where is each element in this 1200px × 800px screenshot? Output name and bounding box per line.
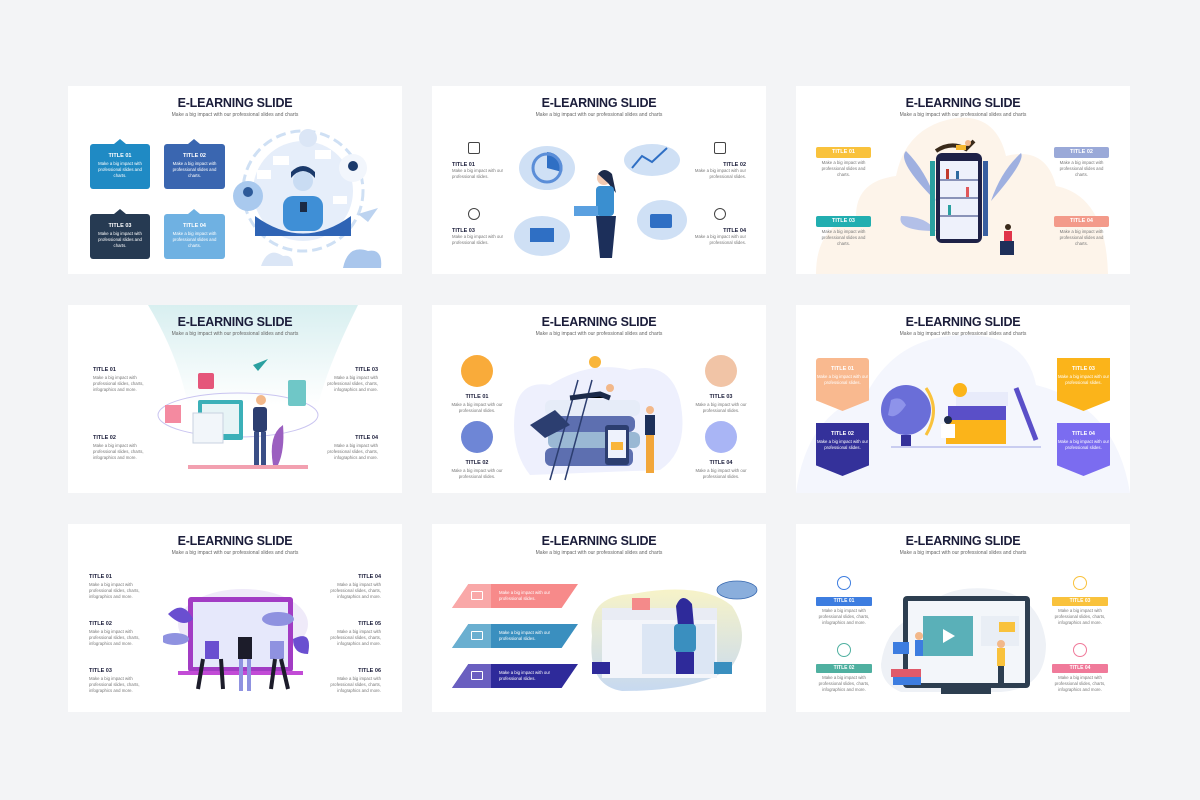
illustration: monitor with video (881, 588, 1046, 694)
item: title 01: TITLE 01 (93, 367, 116, 373)
illustration: books, ladder, students (514, 356, 682, 480)
background cloud (816, 118, 1108, 274)
item: title 02: Make a big impact with professional slides and charts. (1060, 160, 1103, 177)
subtitle: Make a big impact with our professional slides and charts (172, 112, 298, 118)
banner: title 03: Make a big impact with our professional slides. (1058, 374, 1109, 385)
item: title 01 (452, 142, 503, 179)
item: title 03 (89, 668, 140, 693)
item: title 02: TITLE 02 (93, 435, 116, 441)
banner 3: Make a big impact with our professional slides. (499, 670, 550, 681)
item: title 01: Make a big impact with our professional slides. (452, 168, 503, 179)
banner 3 (452, 664, 578, 688)
background shape (148, 305, 358, 384)
item: title 03: TITLE 03 (452, 228, 475, 234)
item: title 03 (1052, 576, 1108, 625)
banner 2 (452, 624, 578, 648)
item: title 02: TITLE 02 (1070, 149, 1093, 155)
item: title 04: Make a big impact with our professional slides. (695, 234, 746, 245)
banner: title 01: TITLE 01 (831, 366, 854, 372)
box: title 02: TITLE 02 (183, 153, 206, 159)
subtitle: Make a big impact with our professional slides and charts (536, 550, 662, 556)
banner: title 04: TITLE 04 (1072, 431, 1095, 437)
illustration: person in circle (233, 129, 382, 268)
banner 1 (452, 584, 578, 608)
heading: E-LEARNING SLIDE (542, 96, 656, 110)
item: title 03: TITLE 03 (832, 218, 855, 224)
subtitle: Make a big impact with our professional slides and charts (900, 550, 1026, 556)
item: title 03: Make a big impact with our professional slides. (695, 402, 747, 413)
item: title 03: Make a big impact with professional slides and charts. (822, 229, 865, 246)
item: title 06: Make a big impact with professional slides, charts, infographics and more. (330, 676, 381, 693)
illustration: phone bookshelf (900, 140, 1022, 255)
item: title 01 (816, 147, 871, 177)
slide 9: pills with monitor (796, 524, 1130, 712)
item: title 02 (89, 621, 140, 646)
heading: E-LEARNING SLIDE (906, 315, 1020, 329)
item: title 01: Make a big impact with our professional slides. (451, 402, 503, 413)
banner 2: Make a big impact with our professional slides. (499, 630, 550, 641)
slide 8: parallelogram banners with teacher (432, 524, 766, 712)
item: title 04: Make a big impact with our professional slides. (695, 468, 747, 479)
heading: E-LEARNING SLIDE (178, 315, 292, 329)
item: title 04: TITLE 04 (723, 228, 746, 234)
banner: title 02 (816, 423, 869, 476)
item: title 04: Make a big impact with professional slides, charts, infographics and more. (330, 582, 381, 599)
item: title 01: TITLE 01 (832, 149, 855, 155)
item: title 05 (330, 621, 381, 646)
item: title 01: TITLE 01 (466, 394, 488, 400)
box: title 04: Make a big impact with professional slides and charts. (173, 231, 216, 248)
item: title 03 (816, 216, 871, 246)
box: title 02: Make a big impact with professional slides and charts. (173, 161, 216, 178)
item: title 03: Make a big impact with professional slides, charts, infographics and more. (1055, 608, 1105, 625)
item: title 06: TITLE 06 (358, 668, 381, 674)
item: title 01 (93, 367, 144, 392)
banner: title 01 (816, 358, 869, 411)
background cloud (796, 335, 1130, 493)
heading: E-LEARNING SLIDE (542, 534, 656, 548)
item: title 03: Make a big impact with our professional slides. (452, 234, 503, 245)
item: title 02: Make a big impact with professional slides, charts, infographics and more. (819, 675, 869, 692)
subtitle: Make a big impact with our professional slides and charts (172, 550, 298, 556)
subtitle: Make a big impact with our professional slides and charts (536, 112, 662, 118)
slide 7: six titles with laptop and graduates (68, 524, 402, 712)
item: title 01: TITLE 01 (452, 162, 475, 168)
item: title 03: Make a big impact with professional slides, charts, infographics and more. (89, 676, 140, 693)
illustration: woman with laptop and blobs (514, 144, 687, 258)
heading: E-LEARNING SLIDE (178, 96, 292, 110)
illustration: globe, books, pencil (881, 383, 1041, 448)
item: title 03: TITLE 03 (1070, 598, 1090, 604)
item: title 01: Make a big impact with professional slides and charts. (822, 160, 865, 177)
banner: title 03 (1057, 358, 1110, 411)
item: title 02: TITLE 02 (834, 665, 854, 671)
item: title 02 (1054, 147, 1109, 177)
item: title 04 (330, 574, 382, 599)
box: title 03: TITLE 03 (109, 223, 131, 229)
item: title 02 (451, 421, 503, 479)
item: title 01 (816, 576, 872, 625)
box: title 01: TITLE 01 (109, 153, 131, 159)
heading: E-LEARNING SLIDE (178, 534, 292, 548)
item: title 01 (89, 574, 140, 599)
item: title 04: TITLE 04 (355, 435, 378, 441)
box: title 02 (164, 144, 225, 189)
item: title 02: Make a big impact with our professional slides. (695, 168, 746, 179)
illustration: screens and man (158, 359, 318, 469)
heading: E-LEARNING SLIDE (906, 534, 1020, 548)
item: title 01: TITLE 01 (834, 598, 854, 604)
item: title 04 (695, 208, 746, 245)
subtitle: Make a big impact with our professional slides and charts (900, 112, 1026, 118)
item: title 02: TITLE 02 (89, 621, 112, 627)
slide 3: phone bookshelf with pills (796, 86, 1130, 274)
item: title 04: Make a big impact with professional slides, charts, infographics and more. (1055, 675, 1105, 692)
item: title 03: TITLE 03 (355, 367, 378, 373)
item: title 04 (327, 435, 378, 460)
subtitle: Make a big impact with our professional slides and charts (900, 331, 1026, 337)
item: title 01: TITLE 01 (89, 574, 112, 580)
item: title 03: TITLE 03 (89, 668, 112, 674)
item: title 03: TITLE 03 (710, 394, 732, 400)
box: title 03 (90, 214, 150, 259)
banner: title 02: Make a big impact with our professional slides. (817, 439, 868, 450)
subtitle: Make a big impact with our professional slides and charts (536, 331, 662, 337)
heading: E-LEARNING SLIDE (542, 315, 656, 329)
item: title 02: Make a big impact with professional slides, charts, infographics and more. (89, 629, 140, 646)
box: title 01: Make a big impact with professional slides and charts. (98, 161, 142, 178)
item: title 04 (1052, 643, 1108, 692)
banner 1: Make a big impact with our professional slides. (499, 590, 550, 601)
illustration: video lesson teacher (591, 580, 758, 691)
heading: E-LEARNING SLIDE (906, 96, 1020, 110)
item: title 03 (695, 355, 747, 413)
item: title 04: TITLE 04 (710, 460, 732, 466)
item: title 02: Make a big impact with professional slides, charts, infographics and more. (93, 443, 144, 460)
item: title 04 (1054, 216, 1109, 246)
box: title 01 (90, 144, 150, 189)
item: title 03 (327, 367, 378, 392)
banner: title 04: Make a big impact with our professional slides. (1058, 439, 1109, 450)
item: title 05: Make a big impact with professional slides, charts, infographics and more. (330, 629, 381, 646)
slide 5: circles with books and ladder (432, 305, 766, 493)
item: title 02 (695, 142, 746, 179)
item: title 02: TITLE 02 (466, 460, 488, 466)
item: title 04 (695, 421, 747, 479)
box: title 04: TITLE 04 (183, 223, 206, 229)
item: title 03 (452, 208, 503, 245)
banner: title 02: TITLE 02 (831, 431, 854, 437)
item: title 06 (330, 668, 381, 693)
slide 2: icons with woman and laptop (432, 86, 766, 274)
item: title 02: TITLE 02 (723, 162, 746, 168)
subtitle: Make a big impact with our professional slides and charts (172, 331, 298, 337)
item: title 04: TITLE 04 (358, 574, 381, 580)
item: title 02 (93, 435, 144, 460)
item: title 03: Make a big impact with professional slides, charts, infographics and more. (327, 375, 378, 392)
slide 6: pentagon banners with globe (796, 305, 1130, 493)
item: title 05: TITLE 05 (358, 621, 381, 627)
box: title 04 (164, 214, 225, 259)
box: title 03: Make a big impact with professional slides and charts. (98, 231, 142, 248)
item: title 01: Make a big impact with professional slides, charts, infographics and more. (89, 582, 140, 599)
item: title 04: TITLE 04 (1070, 218, 1093, 224)
item: title 01: Make a big impact with professional slides, charts, infographics and more. (819, 608, 869, 625)
slide 1: speech boxes with blue circle illustration (68, 86, 402, 274)
item: title 02: Make a big impact with our professional slides. (451, 468, 503, 479)
slide 4: teal gradient with tablet (68, 305, 402, 493)
banner: title 01: Make a big impact with our professional slides. (817, 374, 868, 385)
item: title 02 (816, 643, 872, 692)
illustration: laptop with students (163, 589, 309, 691)
banner: title 04 (1057, 423, 1110, 476)
item: title 04: Make a big impact with professional slides, charts, infographics and more. (327, 443, 378, 460)
item: title 01: Make a big impact with professional slides, charts, infographics and more. (93, 375, 144, 392)
item: title 01 (451, 355, 503, 413)
banner: title 03: TITLE 03 (1072, 366, 1095, 372)
item: title 04: TITLE 04 (1070, 665, 1090, 671)
item: title 04: Make a big impact with professional slides and charts. (1060, 229, 1103, 246)
